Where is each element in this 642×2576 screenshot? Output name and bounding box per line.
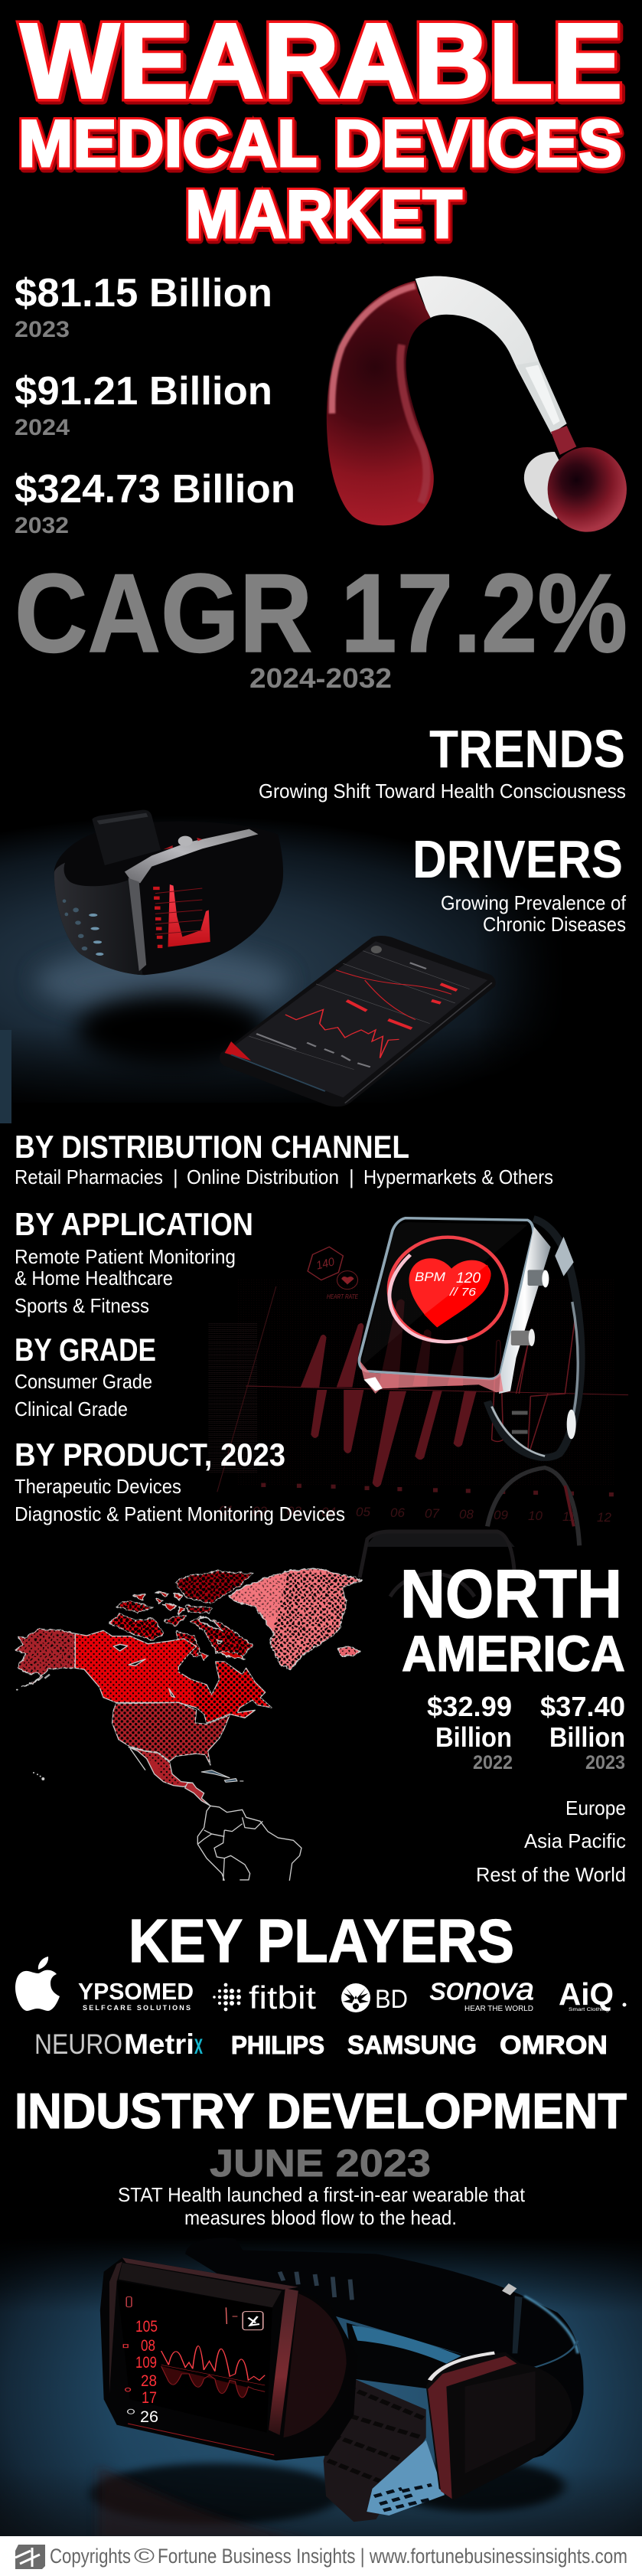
- badge labels: HEART RATE: [327, 1293, 359, 1300]
- trends block: [259, 719, 626, 803]
- title: [18, 2, 624, 254]
- logo: AiQ: Smart Clothing: [569, 2007, 609, 2012]
- value 2022: 2022: [473, 1752, 513, 1773]
- heading: BY DISTRIBUTION CHANNEL: [15, 1129, 409, 1165]
- table glow: [0, 826, 534, 1123]
- watch bottom edge: [360, 1361, 503, 1394]
- screen readings: 109: [135, 2354, 157, 2372]
- watch case: [100, 2257, 357, 2460]
- screen readings: [136, 2320, 158, 2422]
- ear ball: [548, 447, 627, 532]
- segment: grade: [15, 1332, 156, 1420]
- description: STAT Health launched a first-in-ear wearable that: [118, 2183, 526, 2206]
- region: North America: [400, 1555, 626, 1886]
- silver bar: [125, 829, 258, 883]
- title line: MEDICAL DEVICES: MEDICAL DEVICES: [18, 107, 622, 181]
- title line: MARKET: MARKET: [185, 176, 462, 252]
- badge labels: [314, 1255, 359, 1300]
- Alaska: [15, 1629, 75, 1687]
- phone body: [220, 936, 496, 1107]
- photo: wrist device: [0, 2244, 642, 2536]
- logo: BD: BD: [375, 1985, 408, 2014]
- screen readings: 17: [142, 2389, 157, 2407]
- hexagon and heart badges: [308, 1247, 343, 1280]
- segment: distribution channel: [15, 1129, 553, 1188]
- items: Online Distribution: [187, 1165, 339, 1188]
- red chart: [168, 884, 210, 947]
- items: Hypermarkets & Others: [363, 1165, 553, 1188]
- value 2023: [540, 1691, 625, 1773]
- faint watch reflection: [360, 1532, 514, 1597]
- logo: Sonova: sonova: [430, 1973, 534, 2006]
- items: |: [349, 1165, 354, 1188]
- smartphone: [220, 936, 496, 1107]
- inner light strap: [367, 2440, 445, 2516]
- items: Consumer Grade: [15, 1370, 152, 1393]
- Greenland: [228, 1568, 362, 1669]
- footer copyright: Copyrights: [50, 2545, 131, 2568]
- value 2022: $32.99: [427, 1691, 512, 1722]
- logo: Sonova: HEAR THE WORLD: [464, 2005, 533, 2013]
- figure 2024: [15, 369, 272, 440]
- items: [15, 1165, 553, 1188]
- Iceland: [337, 1646, 360, 1656]
- logo: Fitbit: fitbit: [249, 1979, 316, 2015]
- timeline numbers: 02: [253, 1504, 267, 1518]
- timeline numbers: 08: [459, 1507, 474, 1522]
- items: [15, 1370, 152, 1420]
- timeline numbers: 03: [287, 1504, 301, 1518]
- figure 2023: [15, 271, 272, 342]
- timeline numbers: 04: [321, 1505, 336, 1519]
- title line: WEARABLE: WEARABLE: [21, 2, 622, 120]
- logo: Apple: [15, 1957, 60, 2011]
- value 2022: Billion: [435, 1721, 512, 1753]
- section heading: INDUSTRY DEVELOPMENT: [15, 2083, 627, 2139]
- ear tip: [524, 452, 560, 519]
- drivers text: Growing Prevalence of: [441, 891, 627, 914]
- phone charts: [336, 970, 451, 1020]
- timeline numbers: 06: [390, 1505, 405, 1520]
- inner strap dark: [347, 2323, 468, 2389]
- timeline numbers: 07: [425, 1506, 439, 1521]
- United States: [112, 1702, 230, 1765]
- value 2023: Billion: [549, 1721, 625, 1753]
- figure 2024: $91.21 Billion: [15, 369, 272, 414]
- hearing aid hook: [416, 276, 567, 434]
- photo: smart band and phone: [0, 810, 534, 1123]
- trends text: Growing Shift Toward Health Consciousness: [259, 780, 626, 803]
- value 2023: $37.40: [540, 1691, 625, 1722]
- screen readings: 28: [141, 2372, 157, 2390]
- watch screen text: 120: [456, 1270, 481, 1286]
- other regions: [476, 1796, 626, 1886]
- figure 2023: 2023: [15, 317, 70, 342]
- value 2022: [427, 1691, 513, 1773]
- band body: [54, 821, 283, 975]
- title line: MARKET: MARKET: [185, 176, 462, 252]
- footer bar: [0, 2536, 642, 2576]
- watch screen text: [415, 1270, 481, 1299]
- date: JUNE 2023: [210, 2142, 431, 2185]
- other regions: Asia Pacific: [524, 1829, 626, 1852]
- description: [118, 2183, 526, 2229]
- items: [15, 1475, 345, 1525]
- figure 2023: $81.15 Billion: [15, 271, 272, 315]
- title line: WEARABLE: WEARABLE: [21, 2, 622, 120]
- key players heading: KEY PLAYERS: [129, 1907, 514, 1975]
- timeline markers: [261, 1483, 614, 1496]
- value 2023: 2023: [585, 1752, 625, 1773]
- photo: smartwatch over ECG: [209, 1218, 628, 1547]
- top fade to black: [0, 2205, 642, 2313]
- logo: NeuroMetrix: [34, 2028, 203, 2060]
- items: |: [173, 1165, 178, 1188]
- market size figures: [15, 271, 295, 538]
- map: North America: [15, 1568, 362, 1881]
- textured strap: [324, 2374, 426, 2522]
- figure 2024: 2024: [15, 415, 70, 440]
- figure 2032: 2032: [15, 513, 69, 538]
- timeline numbers: 12: [597, 1510, 611, 1525]
- items: Therapeutic Devices: [15, 1475, 181, 1498]
- screen readings: 08: [141, 2337, 155, 2355]
- strap holes: [89, 914, 103, 956]
- backdrop glow: [0, 2244, 642, 2536]
- items: [15, 1245, 236, 1317]
- shadow under watch: [91, 2463, 343, 2525]
- drivers text: Chronic Diseases: [483, 913, 626, 936]
- title line: MARKET: MARKET: [187, 178, 464, 254]
- timeline numbers: 09: [494, 1508, 508, 1522]
- watch buttons: [511, 1270, 549, 1346]
- title line: MEDICAL DEVICES: MEDICAL DEVICES: [18, 107, 622, 181]
- logo: Ypsomed: SELFCARE SOLUTIONS: [83, 2004, 191, 2012]
- heart ring: [389, 1237, 507, 1342]
- smartwatch: [360, 1218, 581, 1547]
- screen readings: 26: [140, 2408, 158, 2426]
- footer: [0, 2536, 642, 2576]
- logo: NeuroMetrix: x: [194, 2028, 203, 2060]
- smart band: [54, 810, 283, 975]
- footer logo: [15, 2545, 45, 2569]
- CAGR period: 2024-2032: [249, 662, 392, 694]
- watch right side: [499, 1227, 551, 1394]
- connector: [551, 426, 576, 455]
- watch screen text: // 76: [449, 1286, 477, 1299]
- logo: NeuroMetrix: Metri: [124, 2028, 194, 2060]
- title line: WEARABLE: WEARABLE: [23, 5, 624, 123]
- South America outline: [197, 1806, 301, 1881]
- segment: product: [15, 1437, 345, 1525]
- logo: Fitbit: [213, 1979, 316, 2015]
- screen readings: 105: [135, 2318, 158, 2336]
- logo: Samsung: SAMSUNG: [347, 2031, 477, 2060]
- region heading: [400, 1555, 625, 1682]
- key player logos: [15, 1957, 626, 2060]
- region heading: AMERICA: [402, 1625, 625, 1682]
- inner strap highlight: [352, 2326, 461, 2364]
- timeline numbers: [219, 1503, 611, 1525]
- watch strap: [487, 1219, 581, 1457]
- far strap: [185, 2238, 584, 2466]
- drivers block: [412, 829, 627, 936]
- heading: BY APPLICATION: [15, 1206, 253, 1242]
- icon: hearing aid: [327, 276, 627, 532]
- logo: AiQ: AiQ: [559, 1976, 614, 2012]
- watch screen: [116, 2280, 117, 2282]
- items: Diagnostic & Patient Monitoring Devices: [15, 1502, 345, 1525]
- clasp: [426, 2355, 537, 2490]
- title line: MEDICAL DEVICES: MEDICAL DEVICES: [20, 110, 624, 183]
- floor darkening: [16, 2480, 642, 2536]
- items: & Home Healthcare: [15, 1267, 173, 1290]
- description: measures blood flow to the head.: [184, 2206, 457, 2229]
- timeline numbers: 01: [219, 1503, 233, 1518]
- timeline numbers: 10: [528, 1509, 543, 1523]
- hearing aid body: [327, 281, 434, 525]
- badge labels: 140: [314, 1255, 336, 1273]
- logo: NeuroMetrix: NEURO: [34, 2028, 122, 2060]
- footer copyright: ©: [134, 2545, 155, 2568]
- ECG spikes: [301, 1299, 477, 1487]
- ECG line: [161, 2346, 265, 2380]
- region heading: NORTH: [400, 1555, 622, 1632]
- heading: BY PRODUCT, 2023: [15, 1437, 285, 1473]
- watch case: [360, 1218, 533, 1379]
- items: Retail Pharmacies: [15, 1165, 163, 1188]
- watch screen text: BPM: [415, 1270, 446, 1284]
- items: Remote Patient Monitoring: [15, 1245, 236, 1268]
- Canada: [75, 1630, 272, 1723]
- phone screen lines: [249, 951, 470, 1070]
- industry development block: [15, 2083, 627, 2229]
- items: Clinical Grade: [15, 1398, 128, 1420]
- Mexico: [129, 1747, 193, 1787]
- phone screen reflection: [225, 1041, 251, 1061]
- Central America: [185, 1783, 210, 1806]
- segment: application: [15, 1206, 253, 1317]
- logo: Omron: OMRON: [500, 2031, 608, 2060]
- ECG background: [209, 1247, 628, 1496]
- other regions: Europe: [565, 1796, 626, 1819]
- timeline numbers: 11: [562, 1509, 576, 1524]
- logo: Ypsomed: YPSOMED: [78, 1978, 194, 2005]
- figure 2032: [15, 467, 295, 538]
- logo: BD: [341, 1983, 408, 2014]
- Caribbean and Hawaii: [16, 1675, 243, 1782]
- other regions: Rest of the World: [476, 1863, 626, 1886]
- timeline numbers: 05: [356, 1505, 370, 1519]
- heart: [409, 1258, 491, 1327]
- figure 2032: $324.73 Billion: [15, 467, 295, 512]
- drivers text: [441, 891, 627, 936]
- reflection under watch: [487, 1468, 579, 1545]
- screen icons: [226, 2307, 237, 2324]
- Arctic islands: [109, 1571, 253, 1660]
- items: Sports & Fitness: [15, 1294, 149, 1317]
- logo: Philips: PHILIPS: [231, 2031, 324, 2059]
- heading: BY GRADE: [15, 1332, 156, 1368]
